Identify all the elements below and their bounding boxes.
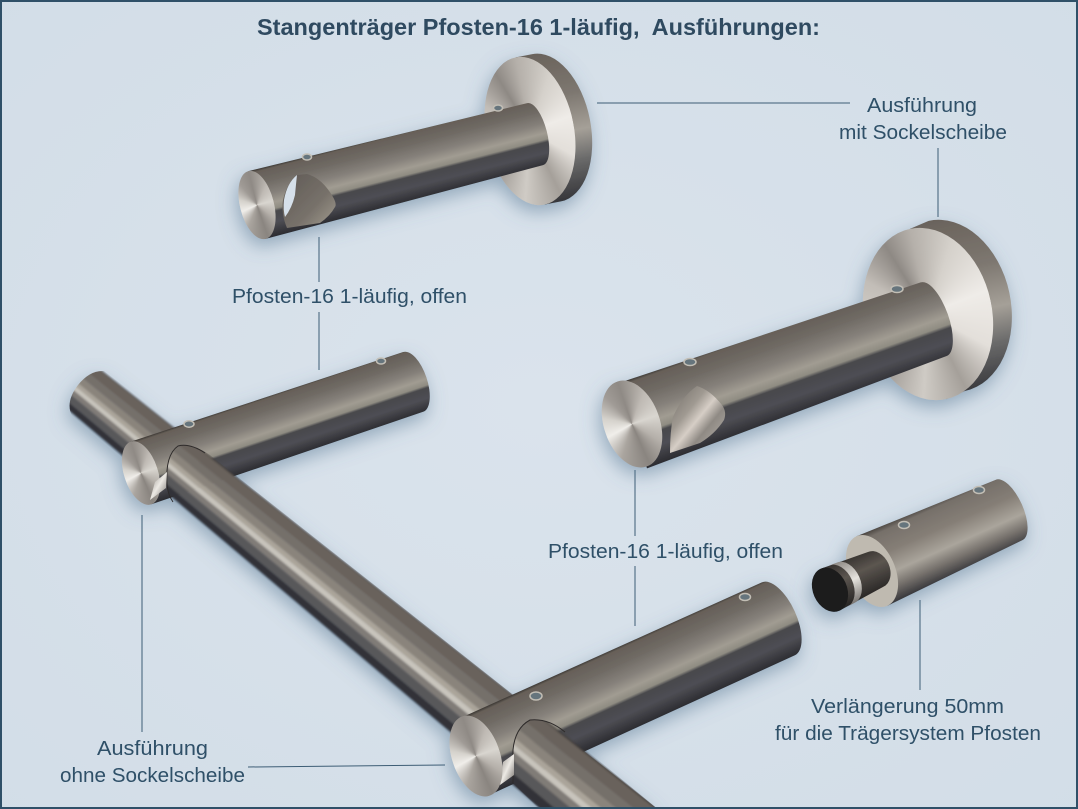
rod arch outline <box>167 445 205 502</box>
rod rear section <box>59 370 176 466</box>
cap reflection <box>500 754 514 785</box>
left post <box>131 346 437 504</box>
slot opening <box>670 386 725 453</box>
carrier system assembly: rod with two posts <box>47 346 812 809</box>
label: extension: für die Trägersystem Pfosten <box>775 723 1041 745</box>
label: top post open: Pfosten-16 1-läufig, offen <box>232 286 467 308</box>
grub screws <box>302 105 502 160</box>
extension piece 50mm <box>799 470 1037 631</box>
extension body <box>799 470 1037 631</box>
rod front section <box>514 720 656 807</box>
tube <box>248 97 555 239</box>
label: with base disc <box>839 95 1007 144</box>
cap reflection <box>150 472 167 500</box>
end cap <box>591 372 673 476</box>
slot opening <box>282 174 336 228</box>
front post end cap <box>440 708 512 804</box>
end cap <box>232 167 282 243</box>
label: without base disc: ohne Sockelscheibe <box>60 765 245 787</box>
front post screws <box>530 594 750 700</box>
rod arch outline <box>513 720 565 783</box>
grub screws <box>684 286 903 366</box>
bracket: right post with base disc <box>591 208 1028 476</box>
leader lines <box>142 103 938 767</box>
left post screws <box>184 358 386 427</box>
label: with base disc: Ausführung <box>867 95 977 117</box>
title: Stangenträger Pfosten-16 1-läufig, Ausführungen: <box>257 14 820 40</box>
rod middle section <box>167 446 655 807</box>
label: without base disc: Ausführung <box>97 738 208 760</box>
label: extension: Verlängerung 50mm <box>811 696 1004 718</box>
bracket: top post with base disc <box>232 46 604 243</box>
label: right post open: Pfosten-16 1-läufig, offen <box>548 541 783 563</box>
label: without base disc <box>60 738 245 787</box>
tube <box>617 272 963 468</box>
front post <box>459 574 812 793</box>
grub screws <box>898 486 984 528</box>
label: extension <box>775 696 1041 745</box>
label: with base disc: mit Sockelscheibe <box>839 122 1007 144</box>
base disc <box>472 46 604 213</box>
left post end cap <box>115 436 167 510</box>
base disc <box>846 208 1028 412</box>
